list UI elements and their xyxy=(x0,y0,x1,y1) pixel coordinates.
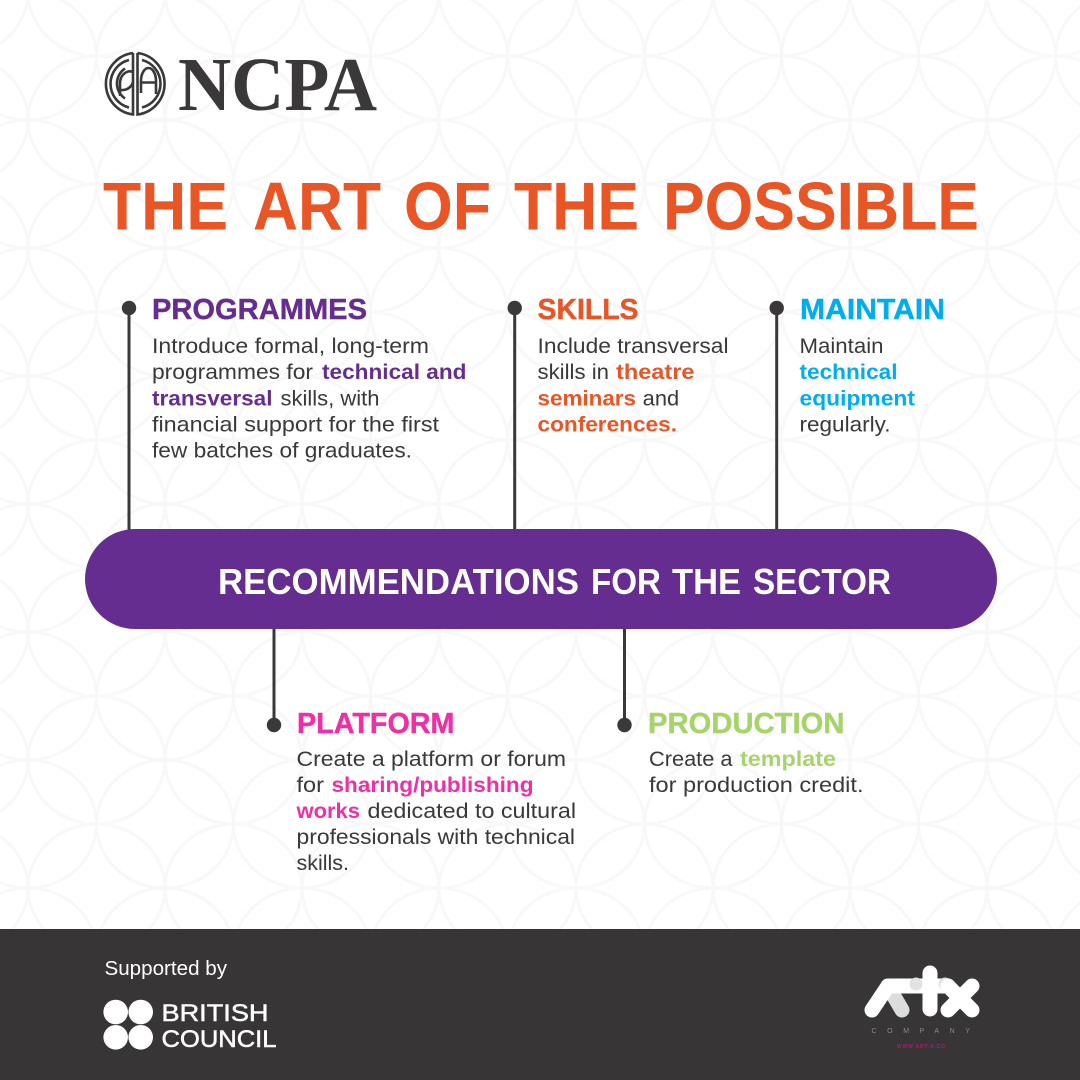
NCPA logo xyxy=(106,43,377,127)
connector line xyxy=(267,626,281,732)
British Council logo xyxy=(103,1000,276,1053)
body text: few batches of graduates. xyxy=(152,438,412,462)
panel: skills xyxy=(508,294,728,532)
body text: regularly. xyxy=(800,412,890,436)
wordmark: NCPA xyxy=(178,43,377,127)
body text: seminars xyxy=(538,386,636,410)
body text: Create a platform or forum xyxy=(296,747,566,771)
body text: for xyxy=(296,773,324,797)
body text: professionals with technical xyxy=(296,825,575,849)
body text: works xyxy=(295,799,360,823)
title: POSSIBLE xyxy=(663,168,979,244)
body text xyxy=(649,747,864,797)
panel: programmes xyxy=(122,294,467,532)
panel: production xyxy=(617,626,864,797)
panel: maintain xyxy=(770,294,945,532)
body text: programmes for xyxy=(152,360,313,384)
company label: COMPANY xyxy=(872,1028,970,1035)
heading: MAINTAIN xyxy=(800,294,945,326)
heading: PRODUCTION xyxy=(648,708,844,740)
body text: technical and xyxy=(322,360,466,384)
body text: and xyxy=(643,386,679,410)
body text xyxy=(538,334,728,436)
body text: skills, with xyxy=(280,386,380,410)
body text: equipment xyxy=(800,386,915,410)
body text: transversal xyxy=(152,386,272,410)
body text: Create a xyxy=(649,747,733,771)
British Council wordmark xyxy=(162,1000,276,1053)
heading: SKILLS xyxy=(538,294,638,326)
body text: Maintain xyxy=(800,334,884,358)
footer xyxy=(0,929,1080,1080)
body text xyxy=(295,747,576,875)
body text: dedicated to cultural xyxy=(368,799,576,823)
body text: skills in xyxy=(538,360,609,384)
panel: platform xyxy=(267,626,576,875)
body text: for production credit. xyxy=(649,773,864,797)
title: OF xyxy=(404,168,491,244)
connector line xyxy=(122,301,136,532)
body text: skills. xyxy=(296,851,349,875)
body text xyxy=(152,334,466,462)
supported by label: Supported by xyxy=(104,958,227,980)
Art-X Company logo xyxy=(872,973,972,1050)
banner label xyxy=(218,561,891,602)
banner label: FOR xyxy=(591,561,661,602)
icon: art-x mark xyxy=(872,973,972,1010)
title: THE xyxy=(103,168,228,244)
banner label: THE xyxy=(672,561,741,602)
British Council wordmark: COUNCIL xyxy=(162,1026,276,1053)
title: ART xyxy=(253,168,381,244)
connector line xyxy=(617,626,632,732)
body text: financial support for the first xyxy=(152,412,439,436)
connector line xyxy=(770,301,784,532)
title xyxy=(103,168,979,244)
body text: Include transversal xyxy=(538,334,728,358)
title: THE xyxy=(514,168,639,244)
icon: four circles xyxy=(103,1000,153,1050)
body text xyxy=(800,334,915,436)
connector line xyxy=(508,301,522,532)
banner label: SECTOR xyxy=(753,561,891,602)
body text: template xyxy=(740,747,836,771)
central banner xyxy=(85,529,997,629)
heading: PLATFORM xyxy=(297,708,454,740)
body text: theatre xyxy=(616,360,695,384)
body text: conferences. xyxy=(538,412,677,436)
banner label: RECOMMENDATIONS xyxy=(218,561,579,602)
body text: technical xyxy=(800,360,898,384)
body text: sharing/publishing xyxy=(332,773,534,797)
body text: Introduce formal, long-term xyxy=(152,334,429,358)
website label: WWW.ART-X.CO xyxy=(897,1044,945,1050)
heading: PROGRAMMES xyxy=(152,294,367,326)
icon: NCPA emblem xyxy=(106,53,165,114)
British Council wordmark: BRITISH xyxy=(162,1000,268,1027)
